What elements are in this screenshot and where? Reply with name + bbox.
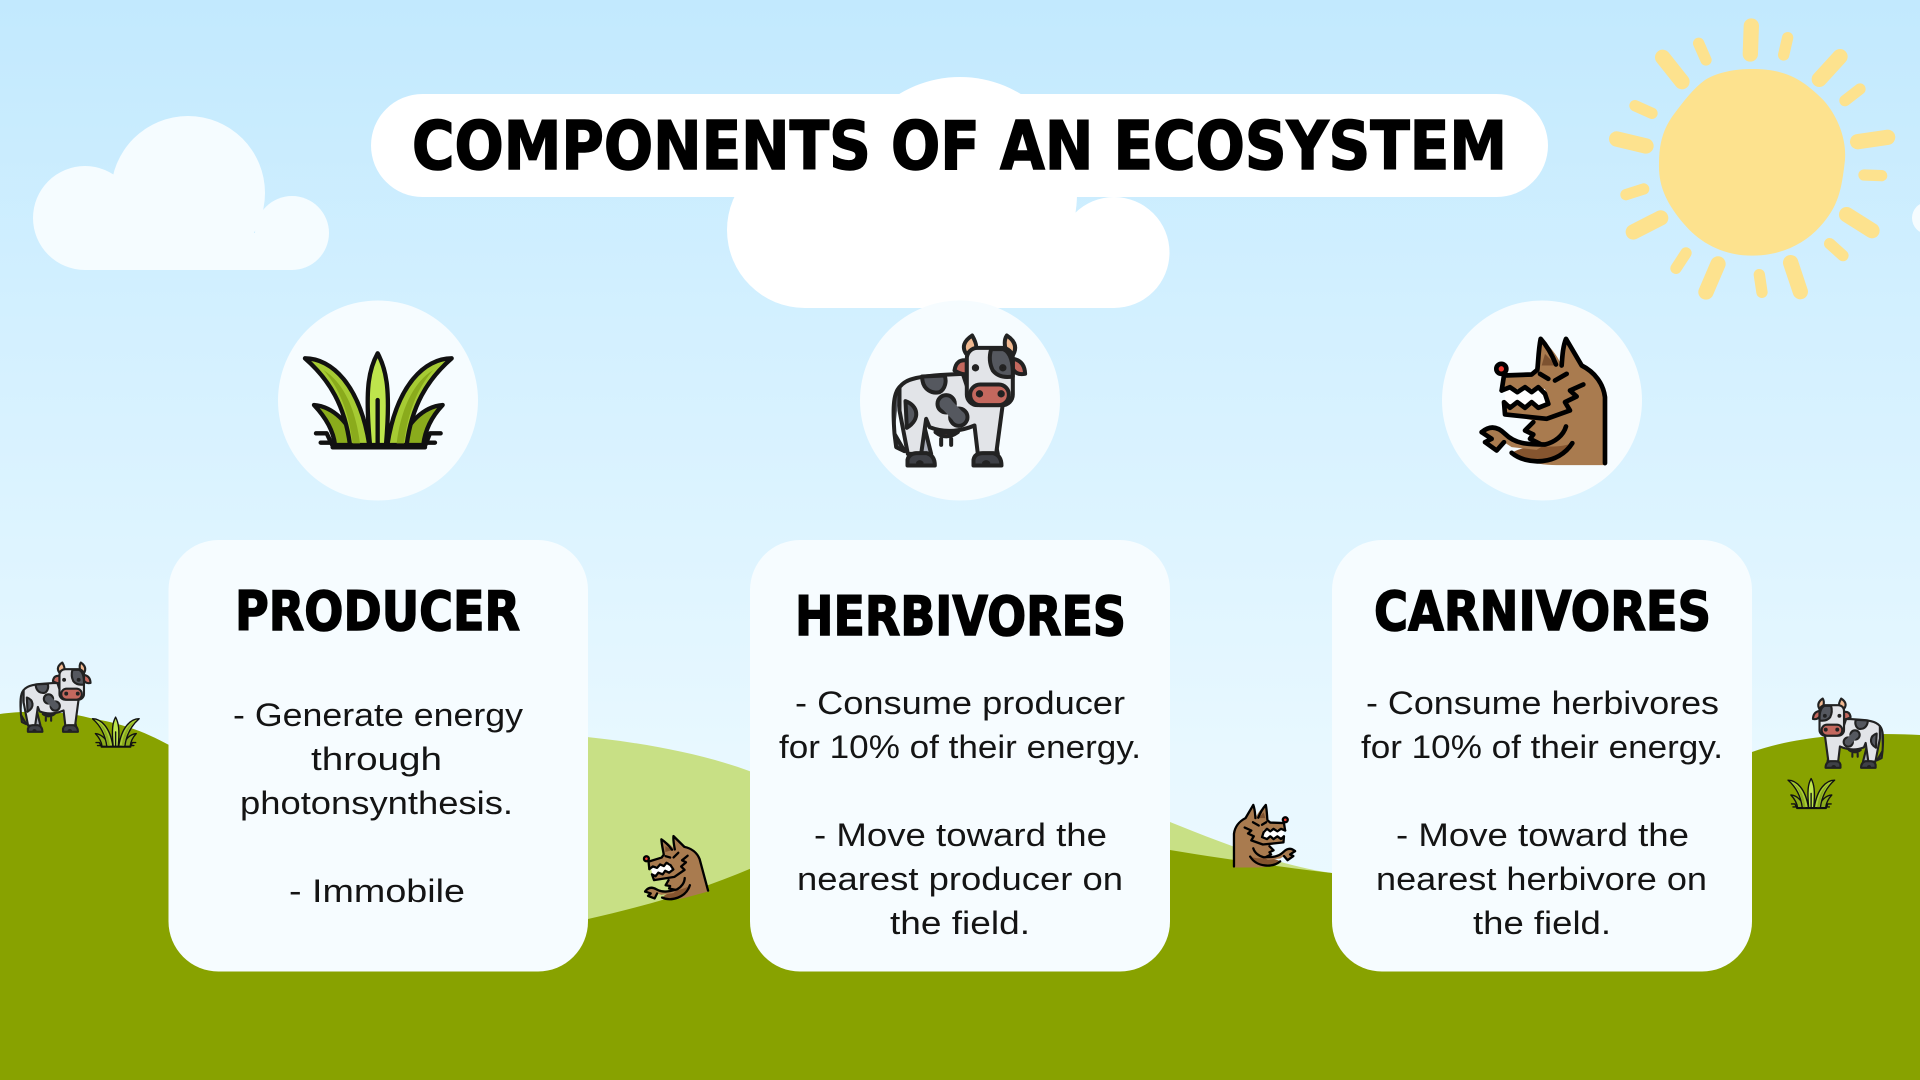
cloud: right edge sliver <box>1912 202 1920 234</box>
icon circle: cow <box>860 300 1060 500</box>
icon: small cow left <box>20 663 91 732</box>
text: carnivores description: for 10% of their energy. <box>1361 729 1723 765</box>
icon: small wolf on hill <box>633 831 708 907</box>
light green back hill <box>500 732 1500 1000</box>
text: herbivores description <box>779 685 1141 941</box>
text: carnivores description: - Move toward the <box>1396 817 1689 853</box>
text: carnivores description: nearest herbivore on <box>1376 861 1707 897</box>
panel: herbivores <box>750 540 1170 972</box>
text: herbivores description: - Move toward the <box>814 817 1107 853</box>
text: carnivores description: - Consume herbivores <box>1366 685 1719 721</box>
title pill <box>371 94 1548 197</box>
text: producer description: - Immobile <box>289 873 465 909</box>
text: carnivores description <box>1361 685 1723 941</box>
cloud: centre <box>727 77 1170 311</box>
text: producer description: - Generate energy <box>233 697 523 733</box>
text: herbivores description: nearest producer on <box>797 861 1123 897</box>
text: herbivores description: the field. <box>890 905 1030 941</box>
icon: small cow right <box>1813 699 1883 768</box>
heading: producer: PRODUCER <box>235 580 520 643</box>
panel: carnivores <box>1332 540 1752 972</box>
text: herbivores description: - Consume producer <box>795 685 1125 721</box>
text: producer description: photonsynthesis. <box>240 785 513 821</box>
cloud: left <box>33 116 329 270</box>
title text: COMPONENTS OF AN ECOSYSTEM <box>412 107 1507 185</box>
icon: small grass left <box>93 717 139 747</box>
text: herbivores description: for 10% of their energy. <box>779 729 1141 765</box>
text: carnivores description: the field. <box>1473 905 1611 941</box>
icon circle: grass <box>278 300 478 500</box>
heading: herbivores: HERBIVORES <box>795 585 1126 648</box>
sun <box>1617 26 1888 292</box>
icon: small grass right <box>1788 779 1835 808</box>
text: producer description: through <box>311 741 442 777</box>
panel: producer <box>168 540 588 972</box>
heading: carnivores: CARNIVORES <box>1374 580 1711 643</box>
icon: small wolf right of herbivores <box>1234 805 1296 867</box>
text: producer description <box>233 697 523 909</box>
dark green foreground hill <box>0 712 1920 1080</box>
icon circle: wolf <box>1442 300 1642 500</box>
